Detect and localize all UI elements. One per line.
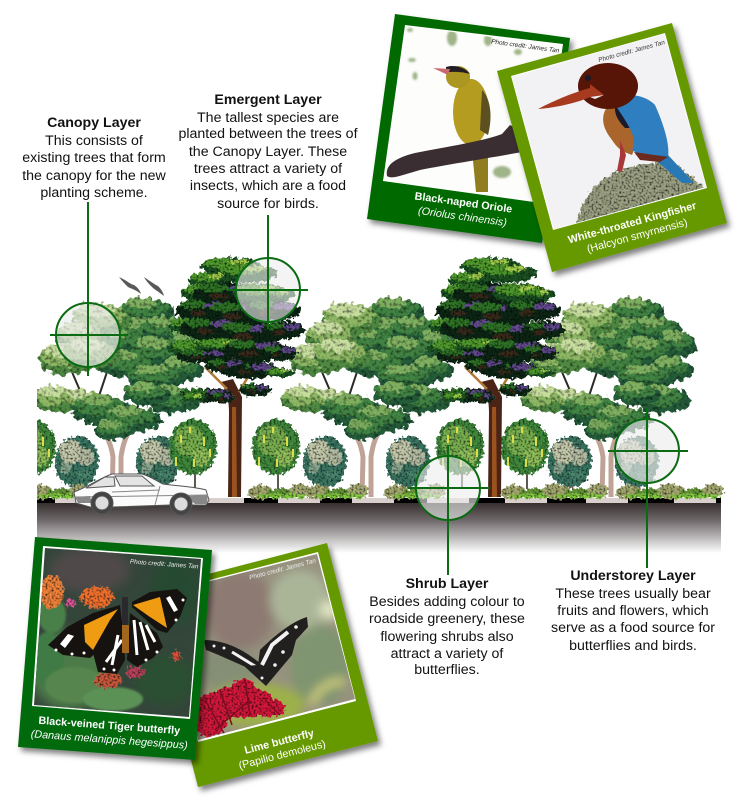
shrubs 7 [616,484,679,499]
callout: shrub layer marker [408,445,490,575]
text: understorey layer: These trees usually bear [555,586,711,602]
kingfisher photo [512,34,706,229]
round tree 6 [615,436,659,490]
tiger butterfly photo [34,548,201,717]
text: emergent layer: trees attract a variety of [194,161,342,177]
credit: Photo credit: James Tan [130,558,199,571]
yellow flowering tree 4 [501,419,549,489]
shrubs 6 [546,484,609,499]
caption: (Papilio demoleus) [237,738,327,772]
text: canopy layer: existing trees that form [22,150,166,166]
emergent tree right [427,257,565,497]
caption: Black-veined Tiger butterfly [38,715,180,737]
shrubs 1 [28,484,91,499]
text: understorey layer [551,568,715,654]
lime butterfly photo [197,554,355,740]
shrubs 5 [501,484,564,499]
yellow flowering tree 1 [169,419,217,489]
text: understorey layer: fruits and flowers, which [557,603,709,619]
canopy tree left [37,295,204,474]
photo card: white-throated kingfisher [497,23,727,272]
round tree 4 [386,436,430,490]
round tree 3 [303,436,347,490]
text: shrub layer: butterflies. [414,662,480,678]
shrubs 8 [661,484,724,499]
shrubs 4 [384,484,447,499]
photo card: lime butterfly [190,543,384,794]
car [74,474,209,515]
shrubs 2 [248,484,311,499]
text: understorey layer: serve as a food source for [551,620,715,636]
text: emergent layer: the Canopy Layer. These [189,144,347,160]
text: emergent layer: source for birds. [217,196,319,212]
caption: White-throated Kingfisher [567,200,698,246]
caption: (Danaus melanippis hegesippus) [30,728,188,752]
shrubs 3 [306,484,369,499]
trees and shrubs [8,257,724,499]
text: emergent layer: planted between the trees of [178,126,358,142]
canopy tree right [521,298,697,497]
text: shrub layer: Shrub Layer [406,576,489,592]
callout: emergent layer marker [228,215,308,329]
photo card: black-veined tiger butterfly [18,537,212,760]
credit: Photo credit: James Tan [598,39,666,64]
photo card: black-naped oriole [367,14,570,243]
emergent tree left [167,257,305,497]
butterfly [48,589,187,674]
yellow flowering tree 0 [37,419,57,476]
text: canopy layer: Canopy Layer [47,115,141,131]
text: shrub layer [369,576,525,678]
caption: Lime butterfly [243,727,315,757]
road surface [37,503,721,553]
caption [414,190,513,229]
oriole photo [386,26,524,192]
text: emergent layer: The tallest species are [197,110,339,126]
text: shrub layer: attract a variety of [391,646,503,662]
round tree 2 [136,436,180,490]
round tree 5 [548,436,592,490]
road and roadside scene [8,257,724,553]
text: canopy layer: This consists of [45,133,143,149]
text: shrub layer: roadside greenery, these [369,611,525,627]
text: understorey layer: Understorey Layer [570,568,696,584]
round tree 1 [55,436,99,490]
callout: understorey layer marker [608,408,688,568]
yellow flowering tree 3 [436,419,484,489]
yellow flowering tree 2 [252,419,300,489]
caption: (Oriolus chinensis) [417,205,508,229]
text: emergent layer: insects, which are a food [190,178,346,194]
text: emergent layer: Emergent Layer [214,92,322,108]
callout: canopy layer marker [50,202,128,376]
kerb [37,498,721,503]
text: emergent layer [178,92,358,212]
credit: Photo credit: James Tan [491,38,560,55]
text: understorey layer: butterflies and birds. [569,638,697,654]
credit: Photo credit: James Tan [248,557,317,582]
caption [30,715,188,752]
canopy tree middle [281,298,457,497]
text: canopy layer [22,115,167,201]
text: canopy layer: planting scheme. [40,185,148,201]
caption: (Halcyon smyrnensis) [586,217,689,256]
text: shrub layer: flowering shrubs also [380,629,514,645]
text: shrub layer: Besides adding colour to [369,594,525,610]
caption: Black-naped Oriole [414,190,513,216]
birds [119,277,164,296]
text: canopy layer: the canopy for the new [22,168,167,184]
